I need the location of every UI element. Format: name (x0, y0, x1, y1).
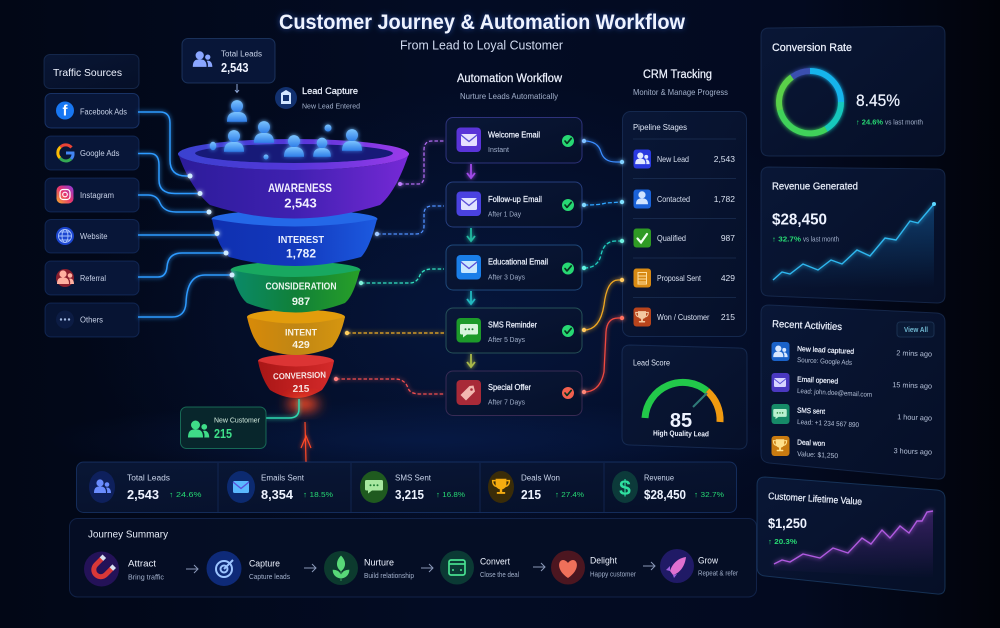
panel: lead score: High Quality Lead (653, 429, 709, 438)
activity: email opened: Lead: john.doe@email.com (797, 388, 872, 399)
step: grow: Grow (698, 556, 718, 566)
panel: customer lifetime value: ↑ 20.3% (768, 537, 797, 546)
donut chart (779, 71, 841, 133)
step: nurture: Nurture (364, 558, 394, 568)
heading: automation workflow: Nurture Leads Automatically (460, 91, 559, 101)
activity: deal won: Deal won (797, 438, 825, 448)
source: Google Ads: Google Ads (80, 149, 120, 158)
step: nurture: Build relationship (364, 571, 414, 580)
connector: conversion to new customer, red glow (266, 397, 319, 462)
heading: automation workflow (457, 73, 563, 101)
activity: email opened: Email opened (797, 375, 838, 386)
stage: qualified: Qualified (657, 233, 686, 243)
step: follow-up email: After 1 Day (488, 210, 521, 218)
step: capture: Capture (249, 558, 280, 568)
new customer card (180, 407, 266, 448)
stat: SMS sent: 3,215 (395, 487, 424, 502)
leads entering the funnel (210, 100, 362, 160)
funnel tier: conversion (258, 354, 334, 398)
step: convert: Convert (480, 556, 510, 566)
panel: stats bar (76, 462, 736, 512)
panel: lead score (622, 345, 747, 449)
stage: new lead: New Lead (657, 154, 689, 164)
funnel tier: awareness: AWARENESS (268, 183, 332, 195)
traffic sources heading: Traffic Sources (53, 68, 122, 79)
total leads card: 2,543 (221, 61, 249, 75)
step: nurture (324, 551, 414, 585)
panel: revenue generated (761, 167, 945, 303)
view all button: View All (904, 327, 928, 334)
step: delight: Delight (590, 556, 617, 566)
step: educational email: After 3 Days (488, 272, 525, 282)
funnel tier: intent: INTENT (285, 328, 317, 338)
stage: contacted (634, 190, 735, 208)
panel: conversion rate (761, 26, 945, 156)
source: Facebook Ads: Facebook Ads (80, 108, 127, 116)
lead capture badge: Lead Capture (302, 86, 358, 97)
step: attract (84, 552, 164, 586)
stat: emails sent: ↑ 18.5% (303, 490, 333, 499)
source: Referral: Referral (80, 274, 106, 283)
source: Instagram: Instagram (80, 191, 114, 200)
arrow: step four to five (467, 354, 475, 367)
total leads card: Total Leads (221, 50, 262, 58)
panel: traffic sources (44, 54, 139, 337)
step: welcome email: Instant (488, 145, 510, 154)
stage: proposal sent: Proposal Sent (657, 273, 702, 283)
funnel tier: awareness (178, 100, 409, 218)
funnel tier: awareness: 2,543 (284, 196, 317, 210)
activity: deal won (772, 436, 932, 460)
source: Google Ads (45, 136, 139, 170)
source: Website (45, 220, 139, 253)
step: educational email (446, 245, 582, 290)
step: special offer: Special Offer (488, 382, 531, 392)
funnel tier: intent (247, 310, 345, 355)
panel: conversion rate: 8.45% (856, 91, 900, 110)
panel: revenue generated: $28,450 (772, 212, 827, 228)
funnel tier: consideration: CONSIDERATION (266, 282, 336, 292)
panel: revenue generated: Revenue Generated (772, 180, 858, 192)
total leads card (182, 38, 275, 92)
activity: SMS sent: Lead: +1 234 567 890 (797, 419, 859, 429)
new customer card: New Customer (214, 416, 260, 424)
funnel (178, 100, 409, 398)
panel: customer lifetime value: Customer Lifetime Value (768, 491, 862, 508)
stage: won / customer (634, 308, 735, 326)
stat: SMS sent (360, 471, 465, 503)
step: capture (206, 551, 290, 586)
arrow: step three to four (467, 291, 475, 304)
step: convert (440, 550, 519, 584)
stat: revenue: $28,450 (644, 487, 686, 502)
stat: total leads: ↑ 24.6% (169, 490, 202, 499)
funnel tier: interest: INTEREST (278, 234, 325, 246)
step: delight (551, 550, 636, 584)
panel: journey summary: Journey Summary (88, 530, 168, 540)
activity: deal won: Value: $1,250 (797, 451, 838, 460)
stage: qualified (634, 228, 735, 248)
step: capture: Capture leads (249, 572, 290, 581)
stat: revenue (612, 471, 724, 503)
stat: deals won: Deals Won (521, 474, 560, 482)
gauge (645, 382, 720, 422)
source: Others (45, 303, 139, 337)
panel: customer lifetime value: $1,250 (768, 515, 807, 531)
heading: CRM tracking: CRM Tracking (643, 69, 712, 81)
stat: SMS sent: SMS Sent (395, 474, 432, 482)
stat: revenue: ↑ 32.7% (694, 490, 724, 499)
view all button (897, 322, 934, 337)
step: delight: Happy customer (590, 570, 636, 578)
activity: deal won: 3 hours ago (893, 446, 932, 456)
funnel tier: interest (212, 210, 378, 266)
heading: CRM tracking (633, 69, 728, 97)
stat: deals won (488, 471, 584, 503)
activity: SMS sent (772, 404, 932, 429)
arrow: attract to capture (186, 565, 198, 573)
activity: new lead captured: New lead captured (797, 344, 854, 356)
step: attract: Bring traffic (128, 572, 164, 582)
activity: email opened (772, 373, 932, 399)
step: follow-up email: Follow-up Email (488, 194, 542, 204)
traffic sources heading (44, 54, 139, 88)
stage: new lead: 2,543 (714, 154, 735, 164)
activity: email opened: 15 mins ago (892, 380, 932, 390)
arrow: capture to nurture (304, 564, 316, 572)
activity: new lead captured: Source: Google Ads (797, 357, 853, 367)
stage: contacted: Contacted (657, 194, 690, 204)
panel: revenue generated: vs last month (803, 234, 839, 244)
step: SMS reminder (446, 308, 582, 353)
stage: proposal sent: 429 (721, 273, 735, 283)
funnel tier: intent: 429 (292, 339, 310, 351)
panel: journey summary (70, 518, 756, 597)
step: SMS reminder: SMS Reminder (488, 320, 537, 330)
step: special offer: After 7 Days (488, 398, 525, 406)
stage: proposal sent (634, 268, 735, 288)
stat: SMS sent: ↑ 16.8% (436, 490, 465, 499)
panel: recent activities: Recent Activities (772, 319, 842, 333)
stat: revenue: Revenue (644, 474, 675, 482)
step: educational email: Educational Email (488, 256, 548, 266)
panel: customer lifetime value (757, 477, 945, 594)
stage: qualified: 987 (721, 233, 735, 243)
source: Facebook Ads (45, 94, 139, 128)
step: attract: Attract (128, 558, 157, 568)
step: special offer (446, 371, 582, 416)
panel: conversion rate: vs last month (885, 118, 923, 126)
activity: SMS sent: SMS sent (797, 406, 825, 416)
activity: new lead captured: 2 mins ago (896, 348, 932, 358)
source: Facebook Ads: f (62, 102, 68, 120)
arrow: convert to delight (533, 563, 545, 571)
stat: revenue: $ (619, 477, 631, 500)
step: grow (660, 549, 739, 583)
revenue line chart (773, 202, 936, 288)
source: Website: Website (80, 232, 108, 241)
panel: lead score: Lead Score (633, 358, 670, 368)
heading: CRM tracking: Monitor & Manage Progress (633, 87, 728, 97)
arrow: nurture to convert (421, 564, 433, 572)
connectors: traffic sources to funnel (138, 112, 234, 317)
arrow: step two to three (467, 228, 475, 241)
lead capture badge: New Lead Entered (302, 102, 360, 110)
panel: pipeline stages: Pipeline Stages (633, 122, 687, 132)
funnel tier: conversion: 215 (293, 384, 310, 395)
stat: total leads (89, 471, 202, 503)
heading: automation workflow: Automation Workflow (457, 73, 563, 85)
workflow steps (446, 118, 582, 416)
step: convert: Close the deal (480, 570, 519, 579)
activity: SMS sent: 1 hour ago (897, 412, 932, 422)
stat: emails sent (227, 471, 333, 503)
funnel tier: consideration (230, 262, 360, 312)
source: Instagram (45, 178, 139, 212)
arrow: delight to grow (643, 562, 655, 570)
stat: total leads: Total Leads (127, 474, 170, 482)
lifetime value line chart (774, 511, 933, 578)
stat: deals won: ↑ 27.4% (555, 490, 584, 499)
source: Referral (45, 261, 139, 295)
panel: conversion rate: ↑ 24.6% (856, 118, 883, 126)
step: welcome email (446, 118, 582, 163)
step: welcome email: Welcome Email (488, 130, 540, 140)
connectors: workflow to CRM pipeline (582, 139, 624, 394)
panel: lead score: 85 (670, 410, 692, 432)
panel: pipeline stages (622, 112, 746, 336)
stage: won / customer: 215 (721, 312, 735, 322)
funnel tier: consideration: 987 (292, 296, 310, 308)
activity: new lead captured (772, 342, 932, 367)
stat: emails sent: Emails Sent (261, 474, 305, 482)
arrow: step one to two (467, 164, 475, 178)
panel: revenue generated: ↑ 32.7% (772, 234, 801, 244)
stage: won / customer: Won / Customer (657, 312, 710, 322)
title: Customer Journey & Automation Workflow (279, 10, 685, 34)
source: Others: Others (80, 316, 103, 324)
stat: emails sent: 8,354 (261, 487, 294, 502)
stat: total leads: 2,543 (127, 487, 159, 502)
step: follow-up email (446, 182, 582, 227)
stage: new lead (634, 150, 735, 168)
step: grow: Repeat & refer (698, 570, 739, 578)
lead capture badge (275, 86, 360, 110)
funnel tier: conversion: CONVERSION (273, 370, 326, 381)
funnel tier: interest: 1,782 (286, 246, 316, 260)
panel: conversion rate: Conversion Rate (772, 42, 852, 54)
connectors: funnel to automation workflow (334, 141, 444, 394)
stage: contacted: 1,782 (714, 194, 735, 204)
subtitle: From Lead to Loyal Customer (400, 38, 563, 52)
step: SMS reminder: After 5 Days (488, 335, 525, 344)
panel: recent activities (761, 305, 945, 479)
new customer card: 215 (214, 427, 232, 441)
stat: deals won: 215 (521, 487, 541, 502)
